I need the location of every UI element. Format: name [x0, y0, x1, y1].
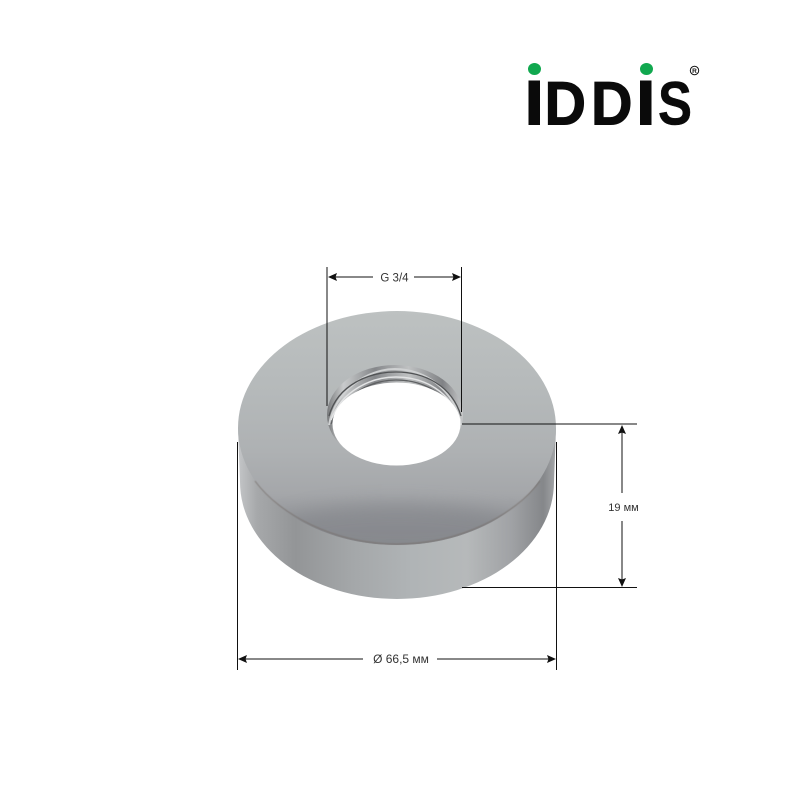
logo letters DD: D [544, 70, 586, 138]
lower extension line [462, 586, 637, 588]
hole opening [332, 382, 460, 466]
threaded hole [327, 365, 463, 466]
label G 3/4: G 3/4 [380, 272, 409, 284]
lower arrow [618, 521, 626, 587]
top face shading [297, 502, 496, 541]
right extension line [556, 442, 558, 670]
right arrow [437, 655, 556, 663]
registered mark: R [692, 68, 697, 75]
extension line right [460, 267, 462, 412]
logo letter S: S [658, 70, 692, 138]
extension line left [326, 267, 328, 406]
logo letters DD [544, 70, 632, 138]
dimension: G 3/4 [327, 267, 462, 412]
logo letter I second [640, 80, 652, 125]
label 19 mm: 19 мм [608, 502, 639, 514]
product: metal flange [238, 311, 556, 599]
logo letter I [528, 80, 540, 125]
dimension line right with arrow [414, 273, 461, 281]
rim seam [255, 481, 540, 544]
left arrow [238, 655, 363, 663]
dimension: diameter 66,5 mm [238, 442, 556, 670]
flange top face [238, 311, 556, 545]
upper arrow [618, 425, 626, 493]
flange side wall [238, 428, 556, 599]
logo green dot left [528, 63, 541, 75]
registered mark [690, 66, 699, 75]
upper extension line [462, 423, 637, 425]
dimension line left with arrow [328, 273, 373, 281]
logo letters DD: D [591, 70, 632, 138]
dimension: 19 mm [462, 424, 639, 588]
left extension line [236, 442, 238, 670]
logo: IDDIS [528, 63, 699, 138]
label diameter: Ø 66,5 мм [373, 652, 429, 666]
logo green dot right [640, 63, 653, 75]
